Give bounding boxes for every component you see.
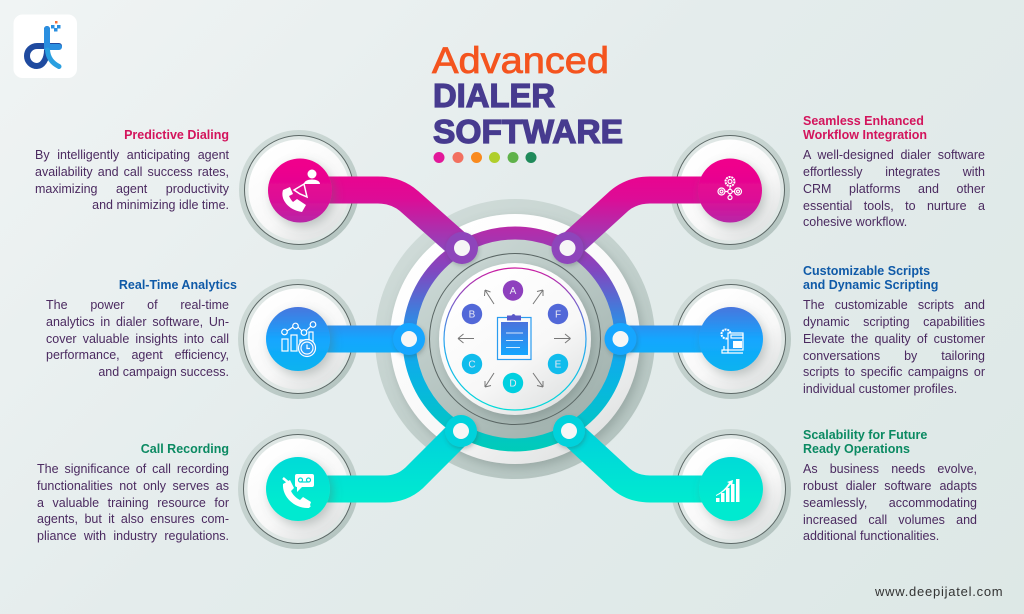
main title: SOFTWARE	[433, 114, 623, 151]
text block: seamless workflow integration: A well-designed dialer software	[803, 148, 985, 162]
text block: customizable scripts: conversations by tailoring	[803, 349, 985, 363]
text block: scalability: Scalability for Future	[803, 428, 927, 442]
icon: real-time analytics	[266, 307, 330, 371]
text block: real-time analytics: and campaign success.	[98, 365, 229, 379]
text block: scalability	[803, 428, 977, 543]
central dial panel	[439, 263, 591, 415]
ring: customizable scripts	[671, 279, 791, 399]
ring: real-time analytics	[238, 279, 358, 399]
clipboard icon	[498, 314, 531, 360]
text block: customizable scripts: The customizable scripts and	[803, 298, 985, 312]
connector node: top right	[552, 232, 584, 264]
text block: call recording: functionalities not only serves as	[37, 479, 229, 493]
text block: real-time analytics: The power of real-time	[46, 298, 229, 312]
text block: customizable scripts: dynamic scripting capabilities	[803, 315, 985, 329]
text block: scalability: As business needs evolve,	[803, 462, 977, 476]
title colour dots	[434, 152, 536, 163]
text block: scalability: additional functionalities.	[803, 529, 939, 543]
text block: scalability: seamlessly, accommodating	[803, 496, 977, 510]
text block: seamless workflow integration: Seamless Enhanced	[803, 114, 924, 128]
connector node: middle right	[604, 323, 636, 355]
text block: scalability: increased call volumes and	[803, 513, 977, 527]
connector node: bottom left	[445, 415, 477, 447]
text block: customizable scripts: scripts to specific campaigns or	[803, 365, 985, 379]
text block: call recording: agents, but it also ensures com-	[37, 512, 229, 526]
text block: customizable scripts: and Dynamic Scripting	[803, 278, 938, 292]
radial arrows	[458, 290, 570, 387]
text block: real-time analytics: Real-Time Analytics	[119, 278, 237, 292]
website url: www.deepijatel.com	[875, 584, 1003, 599]
text block: real-time analytics: analytics in dialer software, Un-	[46, 315, 229, 329]
text block: predictive dialing: Predictive Dialing	[124, 128, 229, 142]
option badges A to F: D	[509, 378, 517, 390]
text block: real-time analytics: performance, agent efficiency,	[46, 348, 229, 362]
text block: call recording: The significance of call recording	[37, 462, 229, 476]
text block: predictive dialing: maximizing agent productivity	[35, 182, 229, 196]
text block: predictive dialing: and minimizing idle time.	[92, 198, 229, 212]
option badges A to F: A	[510, 286, 517, 297]
text block: seamless workflow integration: CRM platforms and other	[803, 182, 985, 196]
ring: call recording	[238, 429, 358, 549]
text block: seamless workflow integration: essential tools, to nurture a	[803, 199, 985, 213]
main title: DIALER	[433, 78, 555, 115]
icon: scalability	[699, 457, 763, 521]
ring: workflow integration	[670, 130, 790, 250]
text block: call recording: pliance with industry regulations.	[37, 529, 229, 543]
text block: predictive dialing: availability and call success rates,	[35, 165, 229, 179]
text block: seamless workflow integration: Workflow Integration	[803, 128, 927, 142]
connector node: bottom right	[553, 415, 585, 447]
text block: customizable scripts: individual customer profiles.	[803, 382, 957, 396]
option badges A to F: C	[468, 360, 476, 370]
text block: call recording	[37, 442, 229, 543]
ring: predictive dialing	[239, 130, 359, 250]
text block: call recording: Call Recording	[141, 442, 229, 456]
text block: scalability: Ready Operations	[803, 442, 910, 456]
option badges A to F: E	[555, 360, 562, 370]
connectors from hub to feature circles	[298, 190, 731, 489]
text block: real-time analytics	[46, 278, 237, 379]
central ring system	[375, 199, 655, 479]
text block: scalability: robust dialer software adapts	[803, 479, 977, 493]
text block: customizable scripts	[803, 264, 985, 396]
ring: scalability	[671, 429, 791, 549]
text block: predictive dialing: By intelligently anticipating agent	[35, 148, 229, 162]
text block: seamless workflow integration: cohesive workflow.	[803, 215, 907, 229]
text block: predictive dialing	[35, 128, 229, 212]
option badges A to F	[462, 280, 568, 393]
icon: workflow integration	[698, 158, 762, 222]
text block: real-time analytics: cover valuable insights into call	[46, 332, 229, 346]
connector node: middle left	[393, 323, 425, 355]
icon: call recording	[266, 457, 330, 521]
text block: seamless workflow integration: effortlessly integrates with	[803, 165, 985, 179]
text block: customizable scripts: Customizable Scripts	[803, 264, 930, 278]
icon: customizable scripts	[699, 307, 763, 371]
option badges A to F: B	[469, 310, 476, 320]
icon: predictive dialing	[268, 158, 332, 222]
main title: Advanced	[432, 40, 609, 81]
text block: customizable scripts: Elevate the quality of customer	[803, 332, 985, 346]
text block: seamless workflow integration	[803, 114, 985, 229]
option badges A to F: F	[555, 310, 561, 320]
connector node: top left	[446, 232, 478, 264]
logo	[14, 14, 77, 78]
main title	[432, 40, 623, 151]
text block: call recording: a valuable training resource for	[37, 496, 229, 510]
